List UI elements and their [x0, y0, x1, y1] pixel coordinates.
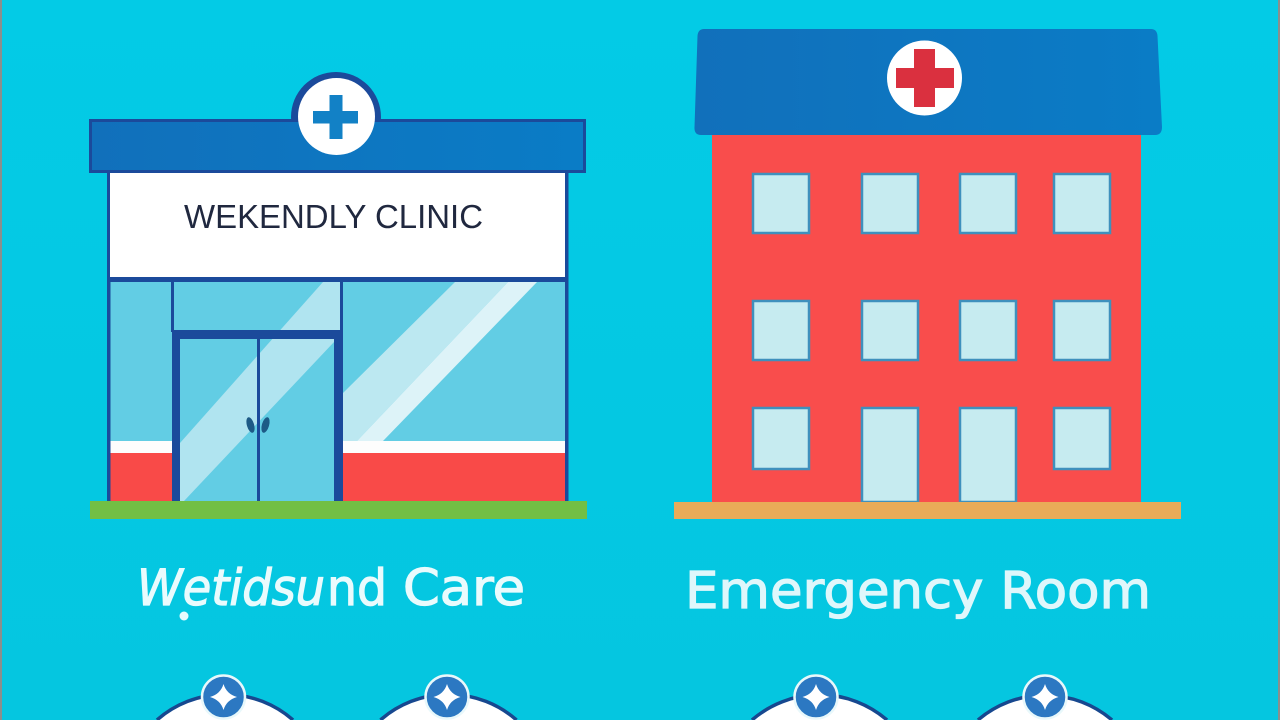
- badge: [202, 676, 245, 718]
- icon: hospital red cross: [887, 40, 962, 116]
- hospital windows and doors: [753, 174, 1110, 502]
- dome icon 2: [380, 676, 516, 720]
- clinic red wall base: [109, 441, 566, 501]
- label: emergency room: Emergency Room: [685, 562, 1151, 621]
- icon: clinic blue cross: [298, 78, 375, 155]
- badge: [426, 676, 468, 718]
- building: emergency hospital: [674, 29, 1181, 519]
- dome icon 1: [157, 676, 293, 720]
- clinic green ground strip: [90, 501, 587, 519]
- clinic sign panel: [107, 172, 568, 282]
- badge: [1024, 676, 1066, 718]
- clinic frame and double door: [107, 172, 568, 502]
- hospital roof: [694, 29, 1162, 135]
- label: weekend care: Wetidsu: [137, 559, 325, 617]
- building: weekend clinic: [90, 72, 587, 519]
- hospital red wall: [712, 130, 1141, 503]
- label: weekend care: nd: [327, 559, 387, 617]
- dome icon 3: [752, 676, 887, 720]
- clinic glass storefront: [108, 280, 567, 501]
- badge: [794, 676, 838, 718]
- dome icon 4: [978, 676, 1112, 720]
- clinic roof: [90, 72, 584, 172]
- label: weekend care: [137, 559, 525, 620]
- hospital orange ground strip: [674, 502, 1181, 519]
- icon: door handles: [245, 416, 271, 434]
- label: weekend care: Care: [403, 559, 525, 617]
- clinic sign text: WEKENDLY CLINIC: [184, 198, 483, 235]
